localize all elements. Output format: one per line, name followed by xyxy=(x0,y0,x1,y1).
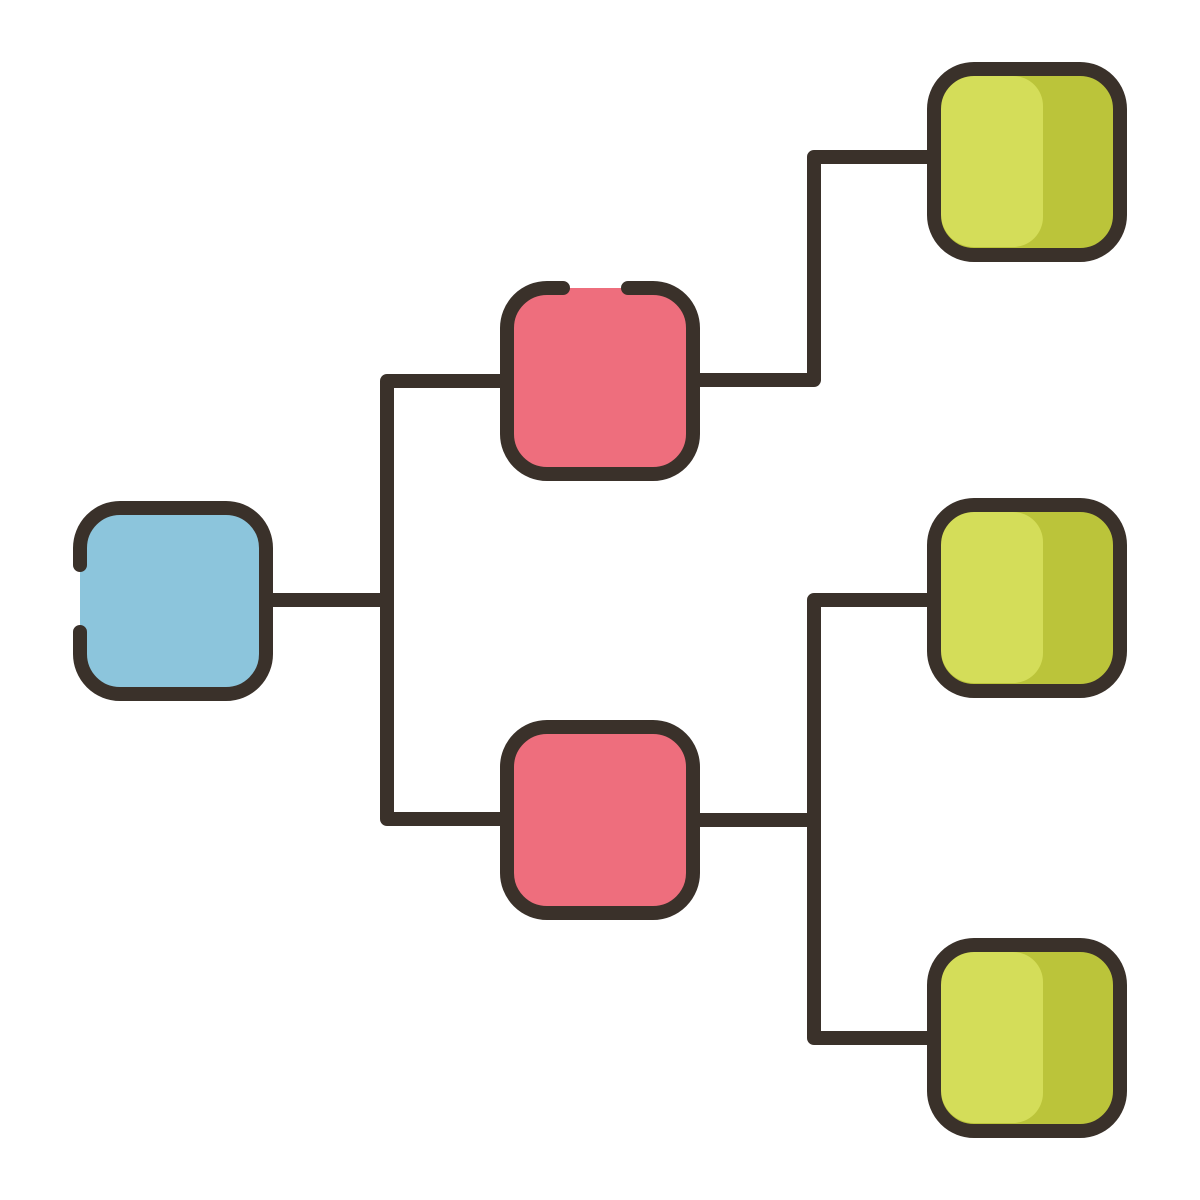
connector: upper red node to top green node xyxy=(693,157,934,380)
node: upper red box xyxy=(507,288,693,474)
node: middle green box xyxy=(934,505,1120,691)
connectors: lower red node to lower green nodes xyxy=(693,600,934,1038)
node: root blue box xyxy=(80,508,266,694)
node: top green box xyxy=(934,69,1120,255)
node: bottom green box xyxy=(934,945,1120,1131)
connectors: root to second level xyxy=(266,381,507,819)
node: lower red box xyxy=(507,727,693,913)
